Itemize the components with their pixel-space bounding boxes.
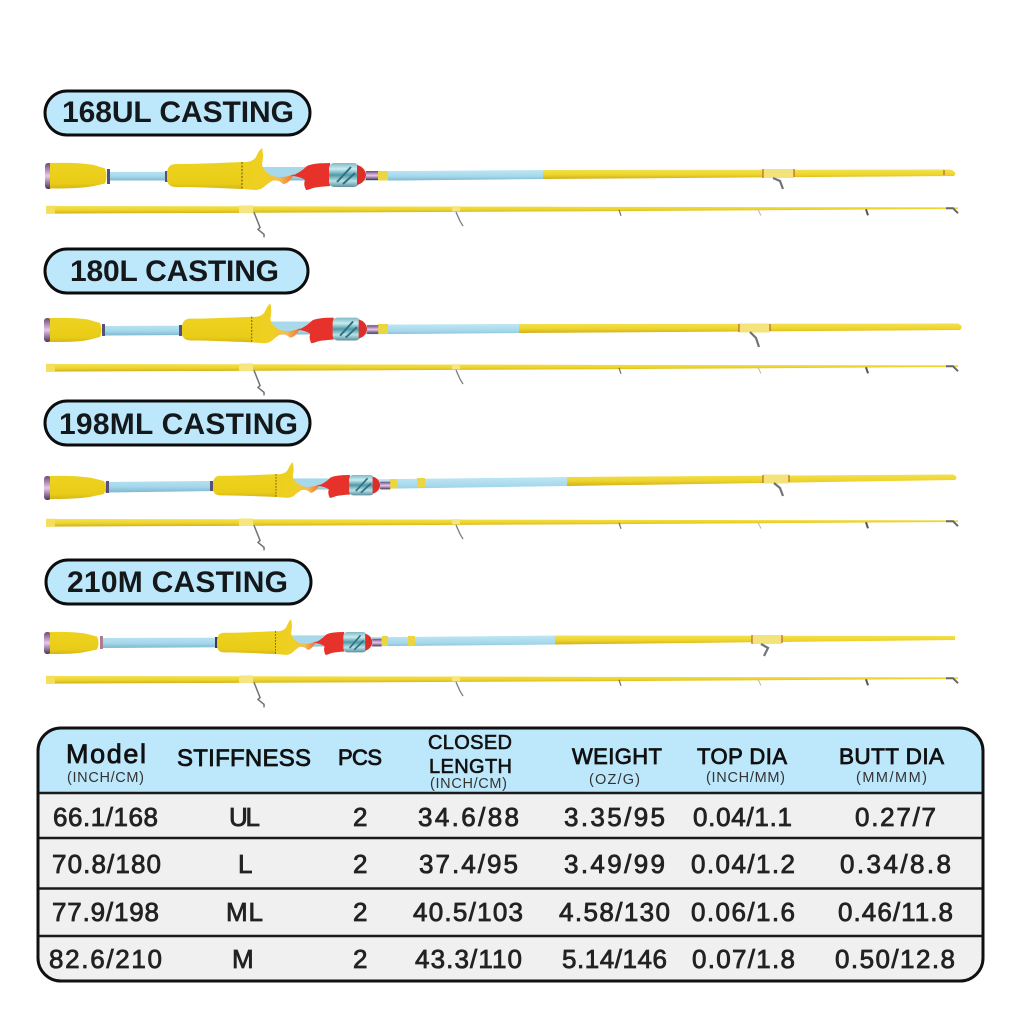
row: 210 M: 0.07/1.8	[692, 944, 795, 974]
label: 180L casting: 180L CASTING	[70, 255, 279, 288]
rear grip	[44, 318, 182, 342]
row: 168 UL: 0.04/1.1	[693, 802, 792, 832]
header: butt dia: (MM/MM)	[856, 770, 927, 786]
header: model	[66, 739, 146, 786]
rod: 198ML upper section	[44, 462, 957, 500]
header: model: Model	[66, 739, 146, 769]
label: 198ML casting	[45, 401, 310, 445]
reel seat and fore grip	[217, 619, 382, 655]
row: 180 L: 37.4/95	[419, 849, 518, 879]
header: top dia: (INCH/MM)	[706, 770, 785, 786]
rear grip	[44, 632, 218, 654]
header: closed length: (INCH/CM)	[430, 776, 507, 792]
rod: 168UL lower section	[46, 204, 958, 238]
row: 198 ML: 0.06/1.6	[691, 897, 795, 927]
row: 180 L: 0.34/8.8	[840, 849, 951, 879]
row: 210 M: 0.50/12.8	[835, 944, 955, 974]
reel seat and fore grip	[182, 303, 378, 343]
reel seat and fore grip	[167, 148, 378, 190]
rod: 210M upper section	[44, 619, 955, 656]
row: 180 L	[52, 849, 951, 879]
header: closed length	[428, 732, 512, 792]
header: butt dia: BUTT DIA	[839, 744, 944, 769]
row: 180 L: 3.49/99	[564, 849, 665, 879]
row: 180 L: 70.8/180	[52, 849, 161, 879]
rod shaft blue and yellow	[103, 324, 962, 347]
header: top dia	[697, 744, 787, 786]
row: 198 ML: ML	[226, 897, 263, 927]
row: 210 M: 2	[353, 944, 367, 974]
row: 210 M	[49, 944, 955, 974]
row: 198 ML: 40.5/103	[413, 897, 523, 927]
row: 198 ML	[52, 897, 953, 927]
label: 198ML casting: 198ML CASTING	[59, 408, 298, 441]
row: 198 ML: 0.46/11.8	[838, 897, 953, 927]
header: weight: WEIGHT	[572, 744, 662, 769]
rod: 180L lower section	[46, 362, 958, 396]
row: 168 UL: 2	[353, 802, 367, 832]
row: 198 ML: 2	[353, 897, 367, 927]
rod: 210M lower section	[46, 674, 958, 708]
rod: 180L upper section	[44, 303, 962, 347]
header: top dia: TOP DIA	[697, 744, 787, 769]
row: 210 M: M	[232, 944, 254, 974]
label: 168UL casting: 168UL CASTING	[62, 96, 294, 129]
rod shaft blue and yellow	[101, 635, 955, 656]
header: closed length: CLOSED	[428, 732, 512, 754]
header: stiffness: STIFFNESS	[177, 745, 311, 772]
row: 180 L: 2	[353, 849, 367, 879]
row: 168 UL	[53, 802, 936, 832]
label: 180L casting	[45, 249, 308, 293]
row: 210 M: 43.3/110	[415, 944, 522, 974]
header: weight	[572, 744, 662, 788]
row: 168 UL: 66.1/168	[53, 802, 158, 832]
rear grip	[44, 476, 213, 500]
row: 210 M: 82.6/210	[49, 944, 162, 974]
row: 168 UL: 34.6/88	[418, 802, 519, 832]
header: closed length: LENGTH	[429, 756, 512, 778]
header: pcs: PCS	[338, 745, 382, 770]
rod shaft blue and yellow	[108, 169, 955, 189]
row: 180 L: L	[238, 849, 252, 879]
row: 198 ML: 77.9/198	[52, 897, 159, 927]
rod: 168UL upper section	[45, 148, 955, 190]
label: 210M casting	[46, 560, 311, 604]
header: model: (INCH/CM)	[67, 770, 144, 786]
rod: 198ML lower section	[46, 517, 958, 551]
table header band	[38, 728, 983, 792]
specification table	[38, 728, 983, 981]
header: butt dia	[839, 744, 944, 786]
row: 168 UL: UL	[229, 802, 260, 832]
table background	[38, 728, 983, 981]
row: 198 ML: 4.58/130	[559, 897, 670, 927]
row: 168 UL: 0.27/7	[855, 802, 936, 832]
label: 210M casting: 210M CASTING	[67, 566, 288, 599]
reel seat and fore grip	[213, 462, 390, 498]
rod shaft blue and yellow	[105, 474, 957, 496]
row: 210 M: 5.14/146	[562, 944, 667, 974]
label: 168UL casting	[45, 91, 310, 135]
row: 180 L: 0.04/1.2	[691, 849, 795, 879]
header: weight: (OZ/G)	[589, 772, 640, 788]
row: 168 UL: 3.35/95	[564, 802, 665, 832]
rear grip	[45, 163, 168, 189]
